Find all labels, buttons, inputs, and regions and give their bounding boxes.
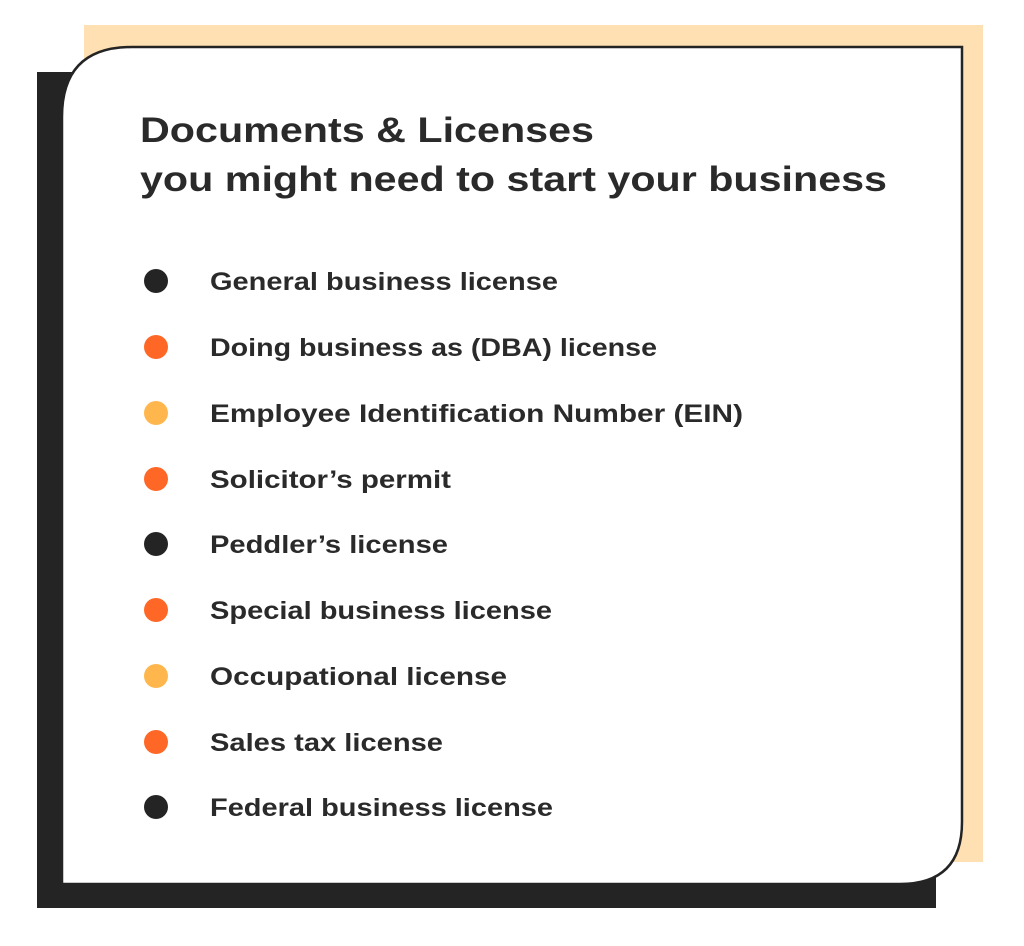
item: Federal business license: Federal business license [210, 794, 553, 822]
title [140, 111, 887, 199]
title: you might need to start your business [140, 160, 887, 199]
item: General business license: General business license [210, 268, 558, 296]
item: EIN: Employee Identification Number (EIN) [210, 400, 743, 428]
panel: black back shadow [37, 72, 936, 908]
panel: white card [62, 47, 962, 884]
item: Peddler's license: Peddler’s license [210, 531, 448, 559]
panel: peach back shadow [84, 25, 983, 862]
item: Occupational license [144, 663, 507, 691]
item: Solicitor's permit [144, 466, 452, 494]
item: Peddler's license [144, 531, 448, 559]
item: DBA license: Doing business as (DBA) license [210, 334, 657, 362]
list: documents and licenses [144, 268, 743, 822]
title: Documents & Licenses [140, 111, 594, 150]
item: Solicitor's permit: Solicitor’s permit [210, 466, 452, 494]
item: Sales tax license: Sales tax license [210, 729, 443, 757]
item: Special business license: Special business license [210, 597, 552, 625]
item: Occupational license: Occupational license [210, 663, 507, 691]
item: Sales tax license [144, 729, 443, 757]
